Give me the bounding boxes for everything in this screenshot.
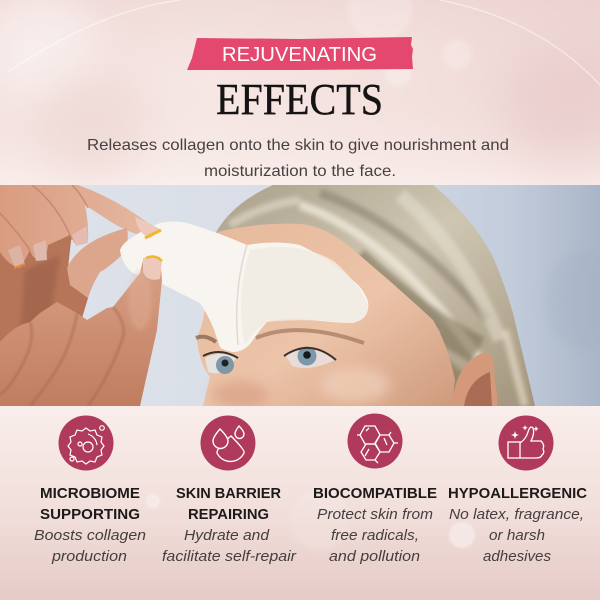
icon: microbe <box>58 416 114 470</box>
description <box>34 527 146 565</box>
label: BIOCOMPATIBLE <box>313 485 437 502</box>
description: adhesives <box>483 548 552 565</box>
intro text: moisturization to the face. <box>204 163 396 180</box>
icon: thumbs up <box>498 416 554 470</box>
feature: skin barrier repairing <box>162 416 297 565</box>
label: REPAIRING <box>188 506 269 523</box>
title: effects: EFFECTS <box>216 75 383 124</box>
label <box>40 485 140 523</box>
description: Hydrate and <box>184 527 270 544</box>
intro text <box>87 137 509 180</box>
label <box>176 485 281 523</box>
description: Protect skin from <box>317 506 433 523</box>
description: facilitate self-repair <box>162 548 297 565</box>
description: No latex, fragrance, <box>449 506 584 523</box>
label: HYPOALLERGENIC <box>448 485 587 502</box>
banner: rejuvenating <box>187 37 413 70</box>
collagen patch <box>120 222 368 352</box>
panel: bottom background <box>0 406 600 600</box>
description: production <box>51 548 127 565</box>
description <box>317 506 433 565</box>
feature: biocompatible <box>313 414 437 565</box>
feature: hypoallergenic <box>448 416 587 565</box>
hair streaks <box>230 193 525 406</box>
description: or harsh <box>489 527 545 544</box>
photo: woman applying forehead patch <box>0 185 600 409</box>
intro text: Releases collagen onto the skin to give nourishment and <box>87 137 509 154</box>
nails <box>135 217 161 238</box>
banner: rejuvenating: REJUVENATING <box>222 44 377 66</box>
eyes and brows <box>196 330 364 374</box>
face <box>197 224 455 406</box>
description: Boosts collagen <box>34 527 146 544</box>
back hand: upper fingers <box>0 185 157 268</box>
hair <box>212 185 535 406</box>
front hand: lower fingers <box>0 257 162 406</box>
panel: top background <box>0 0 600 185</box>
thumb <box>67 228 128 298</box>
description: free radicals, <box>331 527 419 544</box>
label: SUPPORTING <box>40 506 140 523</box>
description <box>162 527 297 565</box>
back hand: palm <box>0 232 88 350</box>
feature: microbiome supporting <box>34 416 146 565</box>
icon: molecule <box>348 414 402 468</box>
description <box>449 506 584 565</box>
description: and pollution <box>329 548 420 565</box>
label: SKIN BARRIER <box>176 485 281 502</box>
ear <box>452 353 497 406</box>
label: MICROBIOME <box>40 485 140 502</box>
icon: water drops <box>200 416 256 470</box>
